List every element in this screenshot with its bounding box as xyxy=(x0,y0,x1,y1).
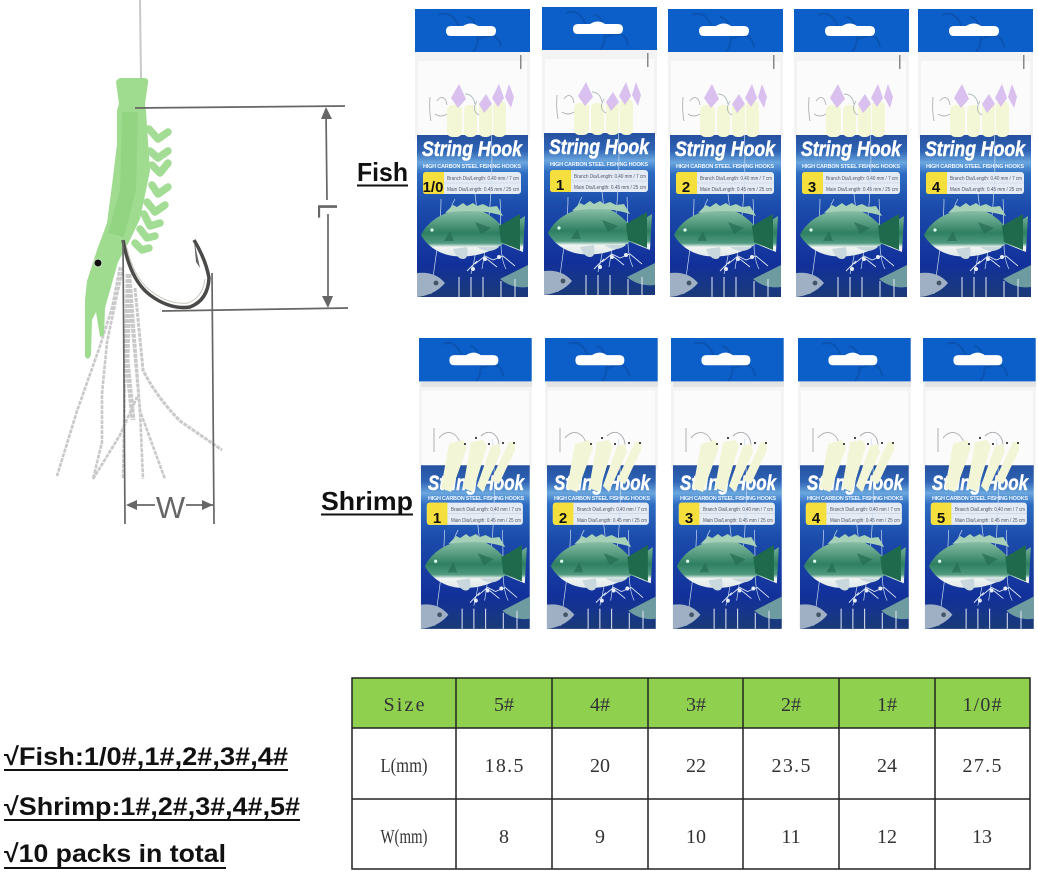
pack: fish size 2: Branch Dia/Length: 0.40 mm / 7 cm xyxy=(700,176,772,182)
pack: shrimp size 1: HIGH CARBON STEEL FISHING HOOKS xyxy=(428,496,524,502)
table row: L: 27.5 xyxy=(962,755,1002,777)
pack: shrimp size 3: Branch Dia/Length: 0.40 mm / 7 cm xyxy=(703,507,773,513)
pack: shrimp size 1: 1 xyxy=(433,510,441,527)
pack: fish size 4: Branch Dia/Length: 0.40 mm / 7 cm xyxy=(950,176,1022,182)
table row: L: 22 xyxy=(686,755,706,777)
pack: shrimp size 5 xyxy=(923,338,1036,629)
pack: shrimp size 1: Branch Dia/Length: 0.40 mm / 7 cm xyxy=(451,507,521,513)
table row: W: 9 xyxy=(595,826,605,848)
pack: fish size 3: Main Dia/Length: 0.45 mm / 25 cm xyxy=(826,187,898,193)
pack: shrimp size 1: Main Dia/Length: 0.45 mm / 25 cm xyxy=(451,518,521,524)
table row: L: 24 xyxy=(877,755,897,777)
pack: shrimp size 5: Branch Dia/Length: 0.40 mm / 7 cm xyxy=(955,507,1025,513)
pack: fish size 4: 4 xyxy=(932,179,941,196)
hook xyxy=(123,240,209,308)
pack: shrimp size 1 xyxy=(419,338,532,629)
pack: fish size 2: Main Dia/Length: 0.45 mm / 25 cm xyxy=(700,187,772,193)
pack: shrimp size 3: String Hook xyxy=(680,472,777,495)
text block: pack contents xyxy=(4,743,300,869)
pack: fish size 1/0: 1/0 xyxy=(423,179,443,196)
pack: shrimp size 4: String Hook xyxy=(807,472,904,495)
shrimp lure legs xyxy=(135,129,168,250)
pack: shrimp size 2: HIGH CARBON STEEL FISHING HOOKS xyxy=(554,496,650,502)
table header row: 5# xyxy=(494,694,514,716)
table row: L: 18.5 xyxy=(484,755,524,777)
table header row: 4# xyxy=(590,694,610,716)
pack: shrimp size 4: Main Dia/Length: 0.45 mm / 25 cm xyxy=(830,518,900,524)
pack: shrimp size 5: HIGH CARBON STEEL FISHING HOOKS xyxy=(932,496,1028,502)
line: total: √10 packs in total xyxy=(4,840,226,868)
table row: W: 11 xyxy=(781,826,801,848)
pack: shrimp size 4 xyxy=(798,338,911,629)
table row: L: 23.5 xyxy=(772,755,810,777)
pack: shrimp size 3: HIGH CARBON STEEL FISHING HOOKS xyxy=(680,496,776,502)
pack: fish size 1/0: Main Dia/Length: 0.45 mm / 25 cm xyxy=(447,187,519,193)
line: fish sizes: √Fish:1/0#,1#,2#,3#,4# xyxy=(4,743,288,771)
pack: fish size 3: HIGH CARBON STEEL FISHING HOOKS xyxy=(802,164,900,170)
table header row: 1/0# xyxy=(962,694,1002,716)
table header row: 2# xyxy=(781,694,801,716)
table row: W: 12 xyxy=(877,826,897,848)
pack: fish size 1: 1 xyxy=(556,177,564,194)
pack: shrimp size 1: String Hook xyxy=(428,472,525,495)
pack: fish size 1: HIGH CARBON STEEL FISHING HOOKS xyxy=(550,162,648,168)
table row: W: 13 xyxy=(972,826,992,848)
table row: L: L(mm) xyxy=(380,755,428,777)
table row: L: 20 xyxy=(590,755,610,777)
pack: fish size 4: Main Dia/Length: 0.45 mm / 25 cm xyxy=(950,187,1022,193)
dimension lines xyxy=(123,106,348,524)
pack: fish size 4: HIGH CARBON STEEL FISHING HOOKS xyxy=(926,164,1024,170)
pack: fish size 1: String Hook xyxy=(549,136,650,159)
pack: fish size 1 xyxy=(542,7,657,295)
illustration: shrimp hook with dimensions xyxy=(57,0,348,525)
pack: fish size 3: Branch Dia/Length: 0.40 mm / 7 cm xyxy=(826,176,898,182)
pack: fish size 1/0 xyxy=(415,9,530,297)
size table xyxy=(352,678,1030,869)
heading: Shrimp: Shrimp xyxy=(321,486,413,516)
table row: W: 8 xyxy=(499,826,509,848)
pack: shrimp size 2 xyxy=(545,338,658,629)
pack: fish size 2: String Hook xyxy=(675,138,776,161)
heading: Fish: Fish xyxy=(357,157,408,187)
pack: shrimp size 5: 5 xyxy=(937,510,945,527)
pack: fish size 2 xyxy=(668,9,783,297)
pack: shrimp size 5: Main Dia/Length: 0.45 mm / 25 cm xyxy=(955,518,1025,524)
pack: fish size 3: String Hook xyxy=(801,138,902,161)
pack: shrimp size 4: HIGH CARBON STEEL FISHING HOOKS xyxy=(807,496,903,502)
pack: shrimp size 2: 2 xyxy=(559,510,567,527)
pack: fish size 3: 3 xyxy=(808,179,816,196)
pack: fish size 2: 2 xyxy=(682,179,690,196)
tinsel skirt xyxy=(57,267,222,479)
pack: shrimp size 4: Branch Dia/Length: 0.40 mm / 7 cm xyxy=(830,507,900,513)
table row: W xyxy=(380,826,992,848)
shrimp eye xyxy=(94,259,102,267)
pack: shrimp size 4: 4 xyxy=(812,510,821,527)
table row: L xyxy=(380,755,1002,777)
label W: W xyxy=(156,490,186,525)
pack: shrimp size 3: Main Dia/Length: 0.45 mm / 25 cm xyxy=(703,518,773,524)
table row: W: 10 xyxy=(686,826,706,848)
pack: fish size 4 xyxy=(918,9,1033,297)
table row: W: W(mm) xyxy=(380,826,428,848)
pack: fish size 2: HIGH CARBON STEEL FISHING HOOKS xyxy=(676,164,774,170)
pack: fish size 1: Main Dia/Length: 0.45 mm / 25 cm xyxy=(574,185,646,191)
pack: shrimp size 2: Main Dia/Length: 0.45 mm / 25 cm xyxy=(577,518,647,524)
pack: shrimp size 3 xyxy=(671,338,784,629)
pack: fish size 1/0: HIGH CARBON STEEL FISHING HOOKS xyxy=(423,164,521,170)
pack: fish size 1/0: Branch Dia/Length: 0.40 mm / 7 cm xyxy=(447,176,519,182)
table header row: Size xyxy=(384,694,425,716)
pack: fish size 3 xyxy=(794,9,909,297)
line: shrimp sizes: √Shrimp:1#,2#,3#,4#,5# xyxy=(4,793,300,821)
pack: fish size 1: Branch Dia/Length: 0.40 mm / 7 cm xyxy=(574,174,646,180)
label L: L xyxy=(312,203,343,219)
pack: shrimp size 3: 3 xyxy=(685,510,693,527)
table header row: 3# xyxy=(686,694,706,716)
pack: shrimp size 2: String Hook xyxy=(554,472,651,495)
table header row: 1# xyxy=(877,694,897,716)
shrimp lure body xyxy=(85,78,150,359)
pack: shrimp size 2: Branch Dia/Length: 0.40 mm / 7 cm xyxy=(577,507,647,513)
table header row xyxy=(384,694,1002,716)
pack: fish size 1/0: String Hook xyxy=(422,138,523,161)
